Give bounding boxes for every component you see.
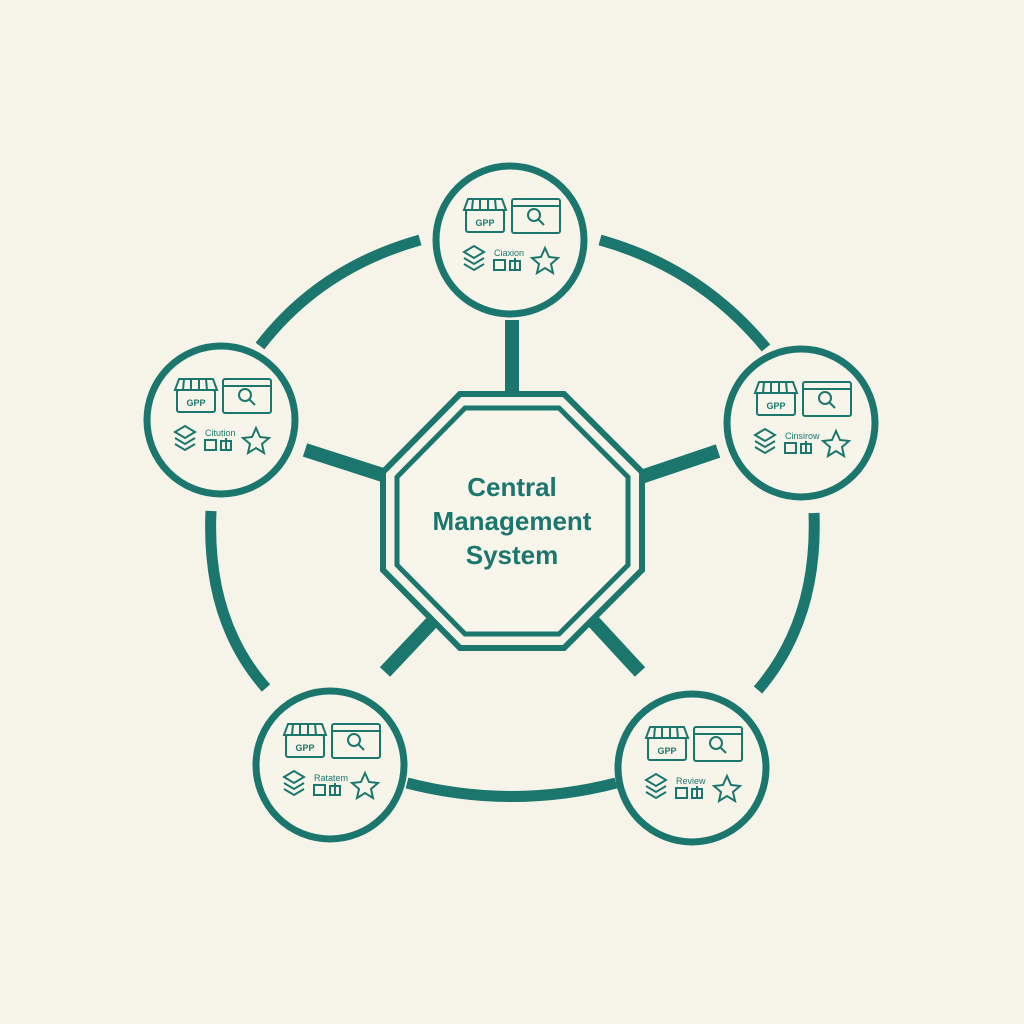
- node: top: Ciaxion: [494, 248, 524, 258]
- central hub: [383, 394, 642, 648]
- node: bottom-right: [618, 694, 766, 842]
- spokes: [305, 320, 718, 672]
- central hub: Central: [467, 472, 557, 502]
- node: top: [436, 166, 584, 314]
- outer ring: [211, 240, 814, 796]
- node: bottom-right: Review: [676, 776, 706, 786]
- node: bottom-left: [256, 691, 404, 839]
- node: right: [727, 349, 875, 497]
- central hub: Management: [433, 506, 592, 536]
- node: bottom-left: Ratatem: [314, 773, 348, 783]
- central hub: System: [466, 540, 558, 570]
- node: left: Citution: [205, 428, 236, 438]
- node: right: Cinsirow: [785, 431, 820, 441]
- node: left: [147, 346, 295, 494]
